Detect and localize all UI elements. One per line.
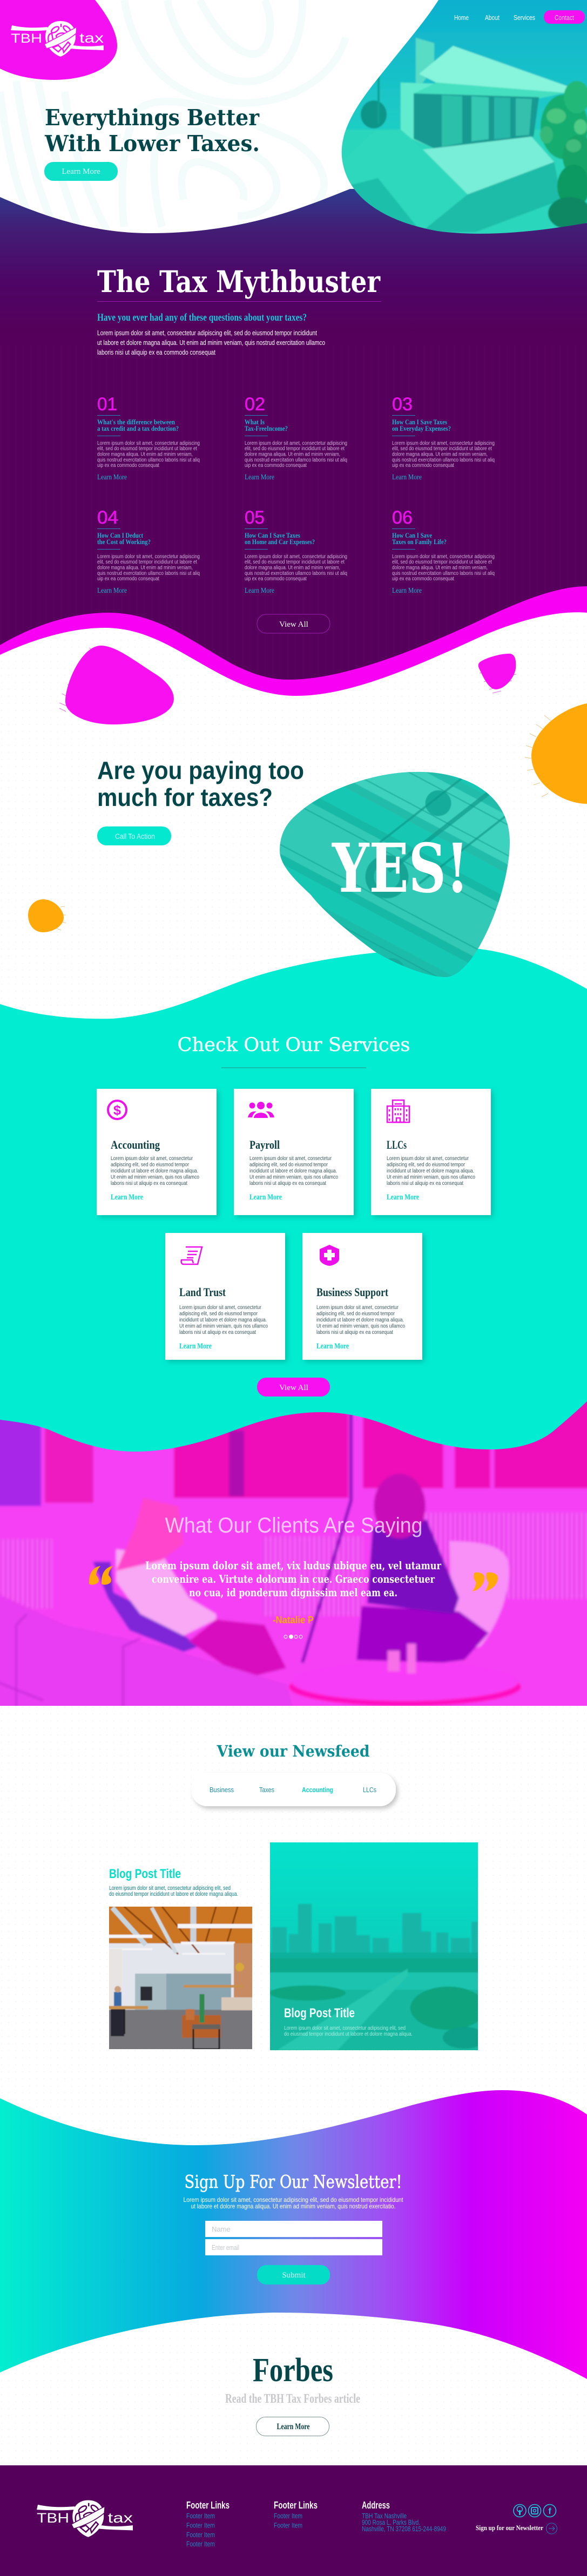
footer address <box>362 2500 446 2533</box>
panel: services teal background <box>0 947 587 1404</box>
myth 03: elit, sed do eiusmod tempor incididunt ut labore et <box>392 446 492 452</box>
navigation: Services <box>514 13 535 22</box>
myth 02: elit, sed do eiusmod tempor incididunt ut labore et <box>245 446 345 452</box>
service card: Land Trust: Ut enim ad minim veniam, quis nos ullamco <box>179 1323 268 1329</box>
footer address: Nashville, TN 37208 615-244-8949 <box>362 2525 446 2533</box>
myth 04: Learn More <box>97 587 127 595</box>
service card: Payroll: laboris nisi ut aliquip ex ea consequat <box>249 1180 326 1187</box>
icon: facebook: f <box>548 2507 551 2516</box>
newsletter form fields: Name <box>212 2225 231 2233</box>
service card: Land Trust: Lorem ipsum dolor sit amet, consectetur <box>179 1304 261 1311</box>
logo: TBH tax <box>11 21 104 57</box>
footer links column 2 <box>274 2500 318 2530</box>
icon: opening quote <box>89 1566 113 1585</box>
icon: dollar coin: $ <box>113 1103 121 1118</box>
footer links column 1: Footer Item <box>186 2531 215 2539</box>
myth 02: Lorem ipsum dolor sit amet, consectetur adipiscing <box>245 440 347 446</box>
mythbuster intro text <box>97 329 325 356</box>
myth 02: Tax-FreeIncome? <box>245 424 288 432</box>
magenta wave divider <box>0 586 587 713</box>
myth 03: on Everyday Expenses? <box>392 424 451 432</box>
service card: Accounting <box>97 1089 217 1215</box>
myth 05: 05 <box>245 507 265 528</box>
footer links column 2: Footer Item <box>274 2512 302 2520</box>
myth 03: Learn More <box>392 473 422 482</box>
myth 01: Lorem ipsum dolor sit amet, consectetur adipiscing <box>97 440 200 446</box>
footer links column 1: Footer Item <box>186 2512 215 2520</box>
service card: Accounting: Accounting <box>111 1138 160 1151</box>
service card: Business Support: laboris nisi ut aliquip ex ea consequat <box>316 1329 393 1336</box>
testimonial author: -Natalie P <box>273 1615 314 1625</box>
myth 05: dolore magna aliqua. Ut enim ad minim veniam, <box>245 565 340 571</box>
myth 05: Learn More <box>245 587 274 595</box>
icon: office building <box>387 1100 409 1122</box>
service card: Payroll <box>234 1089 354 1215</box>
hero heading: With Lower Taxes. <box>44 131 260 157</box>
panel: footer <box>0 2465 587 2576</box>
newsletter form fields <box>205 2221 382 2255</box>
view all outline button <box>257 614 330 633</box>
footer links column 2: Footer Links <box>274 2500 318 2511</box>
service card: LLCs: Lorem ipsum dolor sit amet, consectetur <box>387 1155 469 1162</box>
service card: Accounting: Ut enim ad minim veniam, quis nos ullamco <box>111 1174 199 1180</box>
blog post left text <box>109 1867 238 1897</box>
newsfeed tabs: LLCs <box>363 1786 376 1794</box>
mythbuster subheading: Have you ever had any of these questions about your taxes? <box>97 312 307 323</box>
panel: hero white area <box>0 0 437 233</box>
myth 06: Lorem ipsum dolor sit amet, consectetur adipiscing <box>392 554 495 560</box>
image blob: dollar bills with YES: YES! <box>331 829 469 908</box>
mythbuster intro text: ut labore et dolore magna aliqua. Ut enim ad minim veniam, quis nostrud exercitation ullamco <box>97 338 325 347</box>
myth 01: quis nostrud exercitation ullamco laboris nisi ut aliq <box>97 457 200 463</box>
blog post left text: do eiusmod tempor incididunt ut labore et dolore magna aliqua. <box>109 1891 238 1897</box>
tax mythbuster title: The Tax Mythbuster <box>97 264 381 299</box>
icon: medical shield <box>320 1245 339 1266</box>
forbes learn more button: Learn More <box>276 2422 310 2431</box>
carousel dots <box>284 1635 302 1639</box>
newsfeed tabs: Taxes <box>259 1786 274 1794</box>
myth 04 <box>97 507 200 595</box>
blog post left text: Blog Post Title <box>109 1867 181 1881</box>
service card: Land Trust: laboris nisi ut aliquip ex ea consequat <box>179 1329 256 1336</box>
blog post left text: Lorem ipsum dolor sit amet, consectetur adipiscing elit, sed <box>109 1885 231 1892</box>
newsfeed tabs <box>191 1773 396 1806</box>
service card: Business Support <box>302 1233 422 1360</box>
blog photo: city skyline with overlay: Blog Post Title <box>284 2006 355 2021</box>
hero heading: Everythings Better <box>45 105 260 131</box>
hero image blob: building <box>341 0 587 234</box>
footer address: TBH Tax Nashville <box>362 2512 407 2520</box>
icon: podcast <box>514 2505 526 2517</box>
forbes learn more button <box>256 2417 329 2436</box>
service card: Accounting: incididunt ut labore et dolore magna aliqua. <box>111 1168 198 1174</box>
footer logo: TBH <box>37 2511 69 2526</box>
myth 04: How Can I Deduct <box>97 531 144 539</box>
myth 02: What Is <box>245 418 265 426</box>
myth 02: uip ex ea commodo consequat <box>245 463 307 469</box>
footer links column 1: Footer Item <box>186 2521 215 2530</box>
icon: dollar coin <box>108 1101 126 1119</box>
myth 05: quis nostrud exercitation ullamco laboris nisi ut aliq <box>245 571 347 577</box>
myth 01: elit, sed do eiusmod tempor incididunt ut labore et <box>97 446 197 452</box>
call to action button: Call To Action <box>115 832 155 840</box>
myth 04: quis nostrud exercitation ullamco laboris nisi ut aliq <box>97 571 200 577</box>
myth 02: quis nostrud exercitation ullamco laboris nisi ut aliq <box>245 457 347 463</box>
myth 02: dolore magna aliqua. Ut enim ad minim veniam, <box>245 451 340 458</box>
myth 04: uip ex ea commodo consequat <box>97 576 159 582</box>
call to action button <box>97 826 171 845</box>
panel: white question section <box>0 612 587 1026</box>
testimonial heading: What Our Clients Are Saying <box>165 1514 422 1537</box>
myth 03 <box>392 394 495 482</box>
service card: Payroll: Payroll <box>249 1138 280 1151</box>
footer links column 1 <box>186 2500 230 2548</box>
myth 05: Lorem ipsum dolor sit amet, consectetur adipiscing <box>245 554 347 560</box>
myth 04: 04 <box>97 507 118 528</box>
myth 06 <box>392 507 495 595</box>
mythbuster intro text: laboris nisi ut aliquip ex ea commodo consequat <box>97 348 215 356</box>
myth 05: How Can I Save Taxes <box>245 531 300 539</box>
myth 06: elit, sed do eiusmod tempor incididunt ut labore et <box>392 559 492 565</box>
service card: Land Trust <box>165 1233 285 1360</box>
testimonial quote text <box>145 1559 441 1599</box>
blog photo: office interior <box>109 1907 252 2049</box>
service card: Land Trust: Land Trust <box>179 1285 226 1299</box>
logo: TBH tax: tax <box>79 31 104 46</box>
footer address: 900 Rosa L. Parks Blvd. <box>362 2518 420 2526</box>
service card: Accounting: adipiscing elit, sed do eiusmod tempor <box>111 1162 189 1168</box>
myth 04: elit, sed do eiusmod tempor incididunt ut labore et <box>97 559 197 565</box>
myth 06: Learn More <box>392 587 422 595</box>
service card: Business Support: adipiscing elit, sed do eiusmod tempor <box>316 1311 395 1317</box>
myth 01: 01 <box>97 394 117 415</box>
service card: Payroll: adipiscing elit, sed do eiusmod tempor <box>249 1162 328 1168</box>
decorative blob: large orange <box>525 703 587 804</box>
services view all button: View All <box>279 1384 308 1392</box>
myth 06: quis nostrud exercitation ullamco laboris nisi ut aliq <box>392 571 495 577</box>
question heading: Are you paying too <box>97 756 304 784</box>
decorative blob: small orange <box>28 899 66 932</box>
myth 01: Learn More <box>97 473 127 482</box>
testimonial quote text: no cua, id ponderum dignissim mel eam ea. <box>189 1586 397 1599</box>
service card: Business Support: incididunt ut labore et dolore magna aliqua. <box>316 1317 404 1323</box>
blog photo: city skyline with overlay: do eiusmod tempor incididunt ut labore et dolore magna aliqua. <box>284 2031 413 2037</box>
blog photo: city skyline with overlay <box>265 1842 486 2055</box>
myth 06: 06 <box>392 507 413 528</box>
myth 01 <box>97 394 200 482</box>
service card: Land Trust: incididunt ut labore et dolore magna aliqua. <box>179 1317 267 1323</box>
service card: Payroll: Ut enim ad minim veniam, quis nos ullamco <box>249 1174 338 1180</box>
navigation: Home <box>454 13 469 22</box>
hero button <box>44 162 118 181</box>
submit button <box>257 2265 330 2284</box>
service card: LLCs <box>371 1089 491 1215</box>
decorative blob: small magenta <box>478 654 516 693</box>
newsletter form fields: Enter email <box>212 2243 239 2252</box>
service card: Payroll: Lorem ipsum dolor sit amet, consectetur <box>249 1155 332 1162</box>
service card: Business Support: Learn More <box>316 1342 349 1351</box>
forbes caption: Read the TBH Tax Forbes article <box>225 2392 360 2406</box>
myth 01: uip ex ea commodo consequat <box>97 463 159 469</box>
service card: LLCs: Learn More <box>387 1193 419 1202</box>
service card: Business Support: Business Support <box>316 1285 389 1299</box>
logo blob <box>0 0 117 80</box>
footer links column 1: Footer Item <box>186 2540 215 2548</box>
myth 06: uip ex ea commodo consequat <box>392 576 454 582</box>
footer logo: tax <box>107 2511 133 2526</box>
footer newsletter link: Sign up for our Newsletter <box>476 2524 543 2532</box>
service card: Payroll: incididunt ut labore et dolore magna aliqua. <box>249 1168 337 1174</box>
myth 02 <box>245 394 347 482</box>
navigation: Contact <box>555 13 574 22</box>
navigation: About <box>485 13 500 22</box>
myth 01: a tax credit and a tax deduction? <box>97 424 179 432</box>
myth 01: dolore magna aliqua. Ut enim ad minim veniam, <box>97 451 193 458</box>
newsletter text <box>184 2196 403 2210</box>
service card: Business Support: Lorem ipsum dolor sit amet, consectetur <box>316 1304 399 1311</box>
logo: TBH tax: TBH <box>11 31 42 46</box>
image blob: dollar bills with YES <box>280 772 510 977</box>
service card: Land Trust: Learn More <box>179 1342 212 1351</box>
myth 04: dolore magna aliqua. Ut enim ad minim veniam, <box>97 565 193 571</box>
newsfeed tabs: Business <box>210 1786 234 1794</box>
icon: scroll document <box>181 1247 202 1264</box>
testimonial quote text: convenire ea. Virtute dolorum in cue. Graeco consectetuer <box>152 1572 435 1585</box>
service card: Business Support: Ut enim ad minim veniam, quis nos ullamco <box>316 1323 405 1329</box>
myth 05: on Home and Car Expenses? <box>245 538 315 546</box>
panel: newsletter gradient <box>0 2090 587 2379</box>
myth 06: Taxes on Family Life? <box>392 538 447 546</box>
myth 02: 02 <box>245 394 265 415</box>
myth 03: quis nostrud exercitation ullamco laboris nisi ut aliq <box>392 457 495 463</box>
service card: LLCs: laboris nisi ut aliquip ex ea consequat <box>387 1180 463 1187</box>
panel: tax mythbuster background <box>0 184 587 702</box>
teal wave over testimonial <box>0 1398 587 1452</box>
footer links column 2: Footer Item <box>274 2521 302 2530</box>
forbes logo: Forbes <box>253 2352 333 2389</box>
hero heading <box>44 105 260 157</box>
panel: testimonial photo <box>0 1387 587 1717</box>
mythbuster intro text: Lorem ipsum dolor sit amet, consectetur adipiscing elit, sed do eiusmod tempor incididunt <box>97 329 317 337</box>
navigation <box>454 10 585 24</box>
service card: Accounting: Learn More <box>111 1193 143 1202</box>
myth 03: How Can I Save Taxes <box>392 418 447 426</box>
myth 03: 03 <box>392 394 413 415</box>
service card: Accounting: Lorem ipsum dolor sit amet, consectetur <box>111 1155 193 1162</box>
view all outline button: View All <box>279 620 308 629</box>
services heading: Check Out Our Services <box>177 1034 410 1056</box>
myth 04: Lorem ipsum dolor sit amet, consectetur adipiscing <box>97 554 200 560</box>
service card: Accounting: laboris nisi ut aliquip ex ea consequat <box>111 1180 187 1187</box>
myth 03: uip ex ea commodo consequat <box>392 463 454 469</box>
newsfeed heading: View our Newsfeed <box>217 1742 369 1760</box>
question heading: much for taxes? <box>97 783 273 811</box>
myth 06: How Can I Save <box>392 531 432 539</box>
service card: LLCs: LLCs <box>387 1138 407 1151</box>
myth 05: elit, sed do eiusmod tempor incididunt ut labore et <box>245 559 345 565</box>
icon: closing quote <box>473 1572 498 1591</box>
blog photo: city skyline with overlay: Lorem ipsum dolor sit amet, consectetur adipiscing elit, sed <box>284 2025 406 2031</box>
icon: people <box>248 1102 274 1118</box>
service card: LLCs: incididunt ut labore et dolore magna aliqua. <box>387 1168 474 1174</box>
submit button: Submit <box>282 2271 306 2280</box>
service card: LLCs: Ut enim ad minim veniam, quis nos ullamco <box>387 1174 475 1180</box>
service card: Payroll: Learn More <box>249 1193 282 1202</box>
myth 05 <box>245 507 347 595</box>
service card: LLCs: adipiscing elit, sed do eiusmod tempor <box>387 1162 465 1168</box>
newsfeed tabs: Accounting <box>302 1786 333 1794</box>
newsletter text: ut labore et dolore magna aliqua. Ut enim ad minim veniam, quis nostrud exercitatio. <box>191 2202 395 2210</box>
newsletter heading: Sign Up For Our Newsletter! <box>185 2171 402 2192</box>
newsletter text: Lorem ipsum dolor sit amet, consectetur adipiscing elit, sed do eiusmod tempor incididunt <box>184 2196 403 2204</box>
myth 02: Learn More <box>245 473 274 482</box>
myth 03: Lorem ipsum dolor sit amet, consectetur adipiscing <box>392 440 495 446</box>
services view all button <box>257 1378 330 1397</box>
myth 06: dolore magna aliqua. Ut enim ad minim veniam, <box>392 565 488 571</box>
footer links column 1: Footer Links <box>186 2500 230 2511</box>
footer address: Address <box>362 2500 390 2511</box>
question heading <box>97 756 304 811</box>
icon: facebook <box>543 2505 556 2517</box>
myth 04: the Cost of Working? <box>97 538 151 546</box>
myth 01: What's the difference between <box>97 418 176 426</box>
myth 05: uip ex ea commodo consequat <box>245 576 307 582</box>
service card: Land Trust: adipiscing elit, sed do eiusmod tempor <box>179 1311 258 1317</box>
decorative blob: large magenta <box>59 646 174 724</box>
icon: instagram <box>528 2505 541 2517</box>
hero button: Learn More <box>62 167 100 176</box>
myth 03: dolore magna aliqua. Ut enim ad minim veniam, <box>392 451 488 458</box>
testimonial quote text: Lorem ipsum dolor sit amet, vix ludus ubique eu, vel utamur <box>145 1559 441 1572</box>
footer logo <box>37 2500 133 2537</box>
